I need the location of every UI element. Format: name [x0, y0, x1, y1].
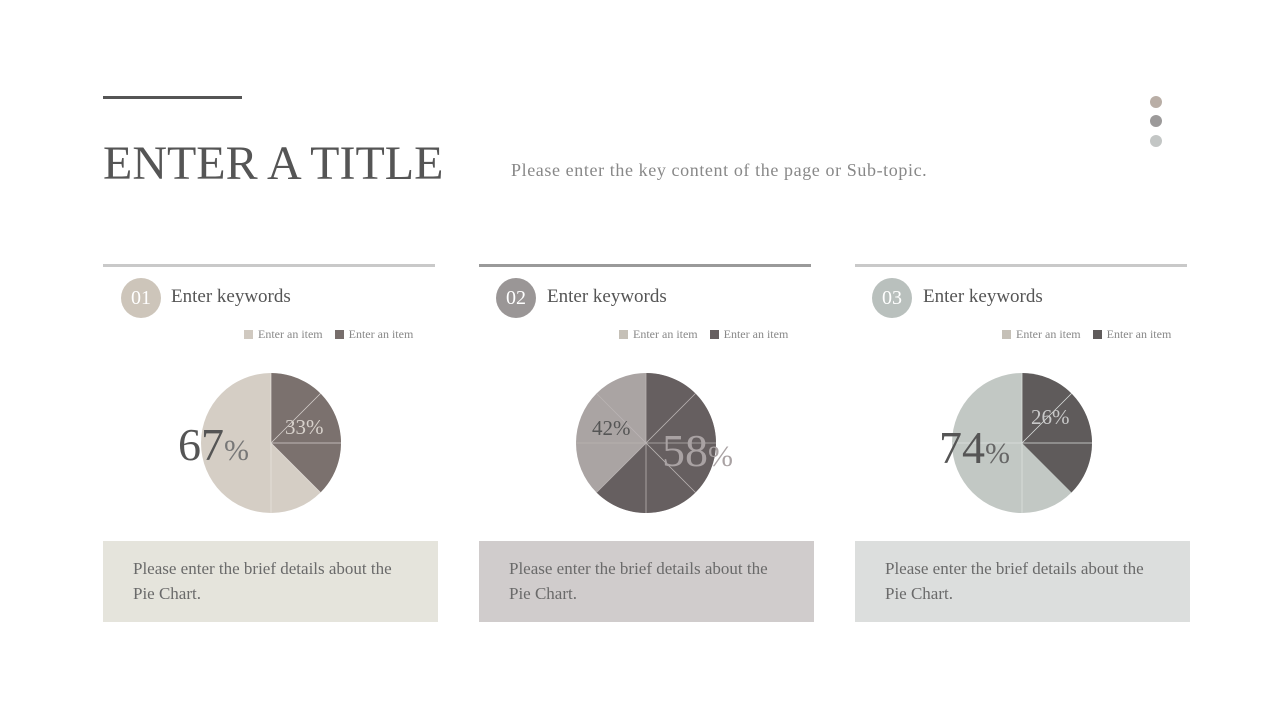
number badge 01: 01 [131, 287, 151, 309]
description box 1: Please enter the brief details about the [133, 559, 392, 578]
number badge 02: 02 [506, 287, 526, 309]
pie 3 labels: 74% [939, 422, 1010, 473]
keyword heading: Enter keywords [547, 286, 667, 307]
description box 2: Please enter the brief details about the [509, 559, 768, 578]
keyword heading: Enter keywords [171, 286, 291, 307]
keyword heading: Enter keywords [923, 286, 1043, 307]
number badge 03 [872, 278, 912, 318]
panel 2 [479, 264, 811, 341]
text: 33% [285, 415, 324, 439]
panel 1 [103, 264, 435, 341]
number badge 03: 03 [882, 287, 902, 309]
number badge 02 [496, 278, 536, 318]
description box 1: Pie Chart. [133, 584, 201, 603]
description box 3 [855, 541, 1190, 622]
pie 1 labels: 67% [178, 419, 249, 470]
legend: Enter an item Enter an item [258, 327, 413, 341]
title accent line [103, 96, 242, 99]
text: 26% [1031, 405, 1070, 429]
panel 3 [855, 264, 1187, 341]
number badge 01 [121, 278, 161, 318]
pie 2 labels: 42% [592, 416, 630, 440]
text: 58% [662, 425, 733, 476]
subtitle: Please enter the key content of the page or Sub-topic. [511, 160, 927, 180]
description box 2: Pie Chart. [509, 584, 577, 603]
decorative dots icon [1150, 96, 1162, 147]
legend: Enter an item Enter an item [1016, 327, 1171, 341]
description box 3: Please enter the brief details about the [885, 559, 1144, 578]
description box 2 [479, 541, 814, 622]
description box 3: Pie Chart. [885, 584, 953, 603]
title: ENTER A TITLE [103, 137, 443, 190]
legend: Enter an item Enter an item [633, 327, 788, 341]
description box 1 [103, 541, 438, 622]
